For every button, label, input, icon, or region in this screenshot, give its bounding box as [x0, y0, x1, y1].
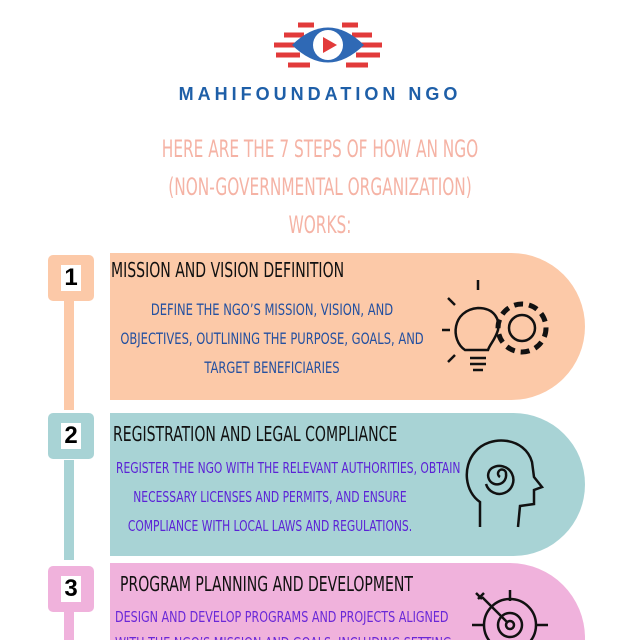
step 2	[48, 413, 585, 560]
text 1: OBJECTIVES, OUTLINING THE PURPOSE, GOALS, AND	[120, 329, 424, 348]
panel 1	[110, 253, 585, 400]
number 3: 3	[64, 575, 78, 602]
text 2: COMPLIANCE WITH LOCAL LAWS AND REGULATIONS.	[128, 517, 412, 535]
number 2	[48, 413, 94, 459]
panel 2	[110, 413, 585, 556]
text 2: REGISTER THE NGO WITH THE RELEVANT AUTHORITIES, OBTAIN	[116, 459, 460, 477]
text 1: TARGET BENEFICIARIES	[204, 358, 340, 377]
intro heading	[162, 135, 478, 239]
number 3	[48, 566, 94, 612]
icon: target	[472, 590, 548, 640]
text 1	[120, 300, 424, 377]
heading 2: REGISTRATION AND LEGAL COMPLIANCE	[113, 422, 397, 446]
logo	[274, 22, 382, 68]
text 1: DEFINE THE NGO’S MISSION, VISION, AND	[151, 300, 393, 319]
text 2: NECESSARY LICENSES AND PERMITS, AND ENSURE	[133, 488, 407, 506]
step 1	[48, 253, 585, 410]
intro heading: HERE ARE THE 7 STEPS OF HOW AN NGO	[162, 135, 478, 163]
step 3	[48, 563, 585, 640]
icon: bulb and gear	[442, 280, 548, 372]
heading 1: MISSION AND VISION DEFINITION	[111, 258, 344, 282]
icon: head	[466, 439, 544, 528]
intro heading: (NON-GOVERNMENTAL ORGANIZATION)	[168, 173, 472, 201]
intro heading: WORKS:	[289, 211, 351, 239]
text 2	[116, 459, 460, 535]
heading 3: PROGRAM PLANNING AND DEVELOPMENT	[120, 572, 413, 596]
text 3	[115, 608, 452, 640]
number 2: 2	[64, 422, 78, 449]
panel 3	[110, 563, 585, 640]
number 1	[48, 255, 94, 301]
logo text: MAHIFOUNDATION NGO	[179, 84, 461, 104]
text 3: DESIGN AND DEVELOP PROGRAMS AND PROJECTS ALIGNED	[115, 608, 448, 626]
number 1: 1	[64, 264, 78, 291]
